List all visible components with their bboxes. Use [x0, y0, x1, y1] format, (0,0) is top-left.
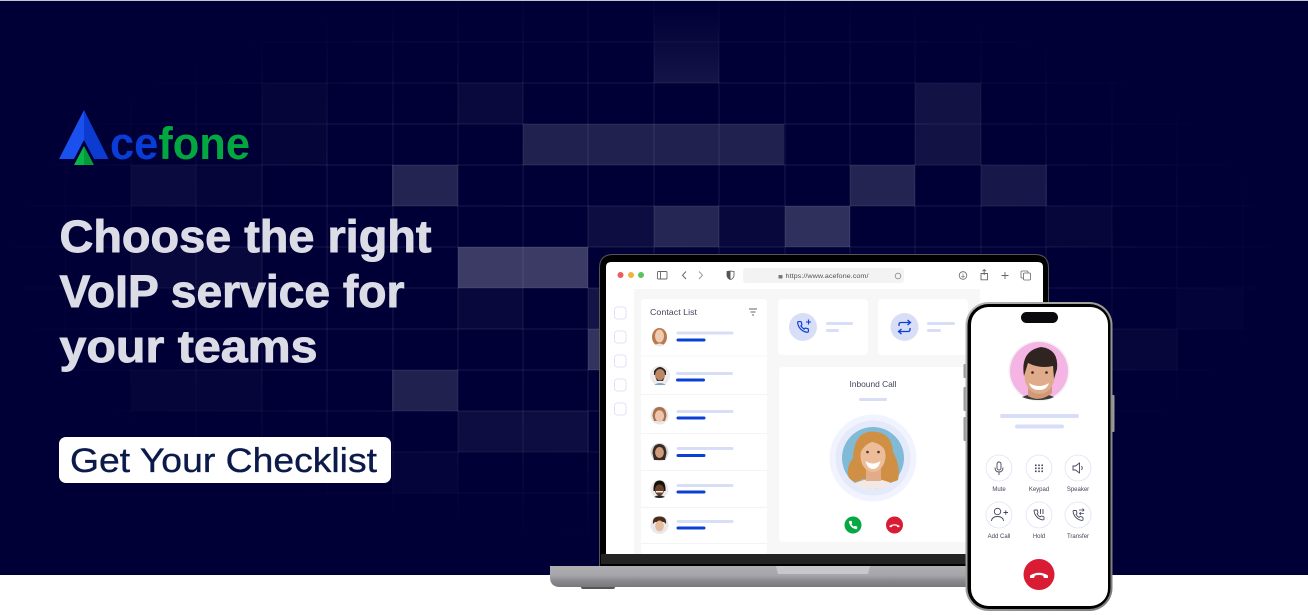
call to action button: Get Your Checklist	[70, 442, 378, 480]
phone side buttons	[964, 364, 1114, 441]
heading: Choose the right	[60, 211, 432, 262]
call control: keypad	[1026, 455, 1052, 493]
contact row 3	[650, 406, 734, 424]
add-call card	[778, 299, 868, 355]
contact list panel: Contact List	[650, 308, 698, 317]
call control: hold	[1026, 502, 1052, 540]
heading	[60, 211, 432, 372]
call control: hold: Hold	[1033, 534, 1045, 540]
logo: Acefone	[59, 110, 250, 169]
phone	[964, 302, 1114, 611]
call control: transfer: Transfer	[1067, 534, 1089, 540]
browser toolbar	[618, 268, 1030, 283]
call control: add call: Add Call	[988, 534, 1010, 540]
laptop screen frame	[599, 254, 1049, 566]
browser toolbar: https://www.acefone.com/	[786, 273, 869, 280]
call control: mute	[986, 455, 1012, 493]
call control: keypad: Keypad	[1029, 487, 1049, 493]
end call button	[1024, 559, 1054, 590]
inbound call panel: Inbound Call	[849, 379, 897, 389]
call control: speaker: Speaker	[1067, 487, 1089, 493]
answer button	[844, 516, 862, 534]
laptop base	[550, 566, 1010, 589]
callee portrait	[1008, 340, 1070, 402]
laptop	[550, 254, 1049, 589]
call control: mute: Mute	[992, 487, 1006, 493]
contact row 5	[650, 480, 734, 498]
contact row 6	[650, 516, 734, 534]
call to action button	[59, 437, 391, 483]
decline button	[886, 516, 903, 534]
caller portrait	[830, 414, 916, 502]
sidebar checkboxes	[614, 307, 626, 415]
app background	[634, 289, 980, 554]
heading: your teams	[60, 321, 318, 372]
heading: VoIP service for	[60, 266, 404, 317]
contact row 2	[650, 366, 733, 386]
callee name placeholders	[1000, 414, 1079, 428]
logo: Acefone: cefone	[110, 118, 250, 169]
phone body	[966, 302, 1112, 611]
call control: add call	[986, 502, 1012, 540]
contact row 1	[652, 328, 734, 346]
call control: transfer	[1065, 502, 1091, 540]
transfer card	[878, 299, 968, 355]
contact row 4	[650, 443, 734, 461]
contact list panel	[641, 299, 767, 554]
inbound call panel	[779, 367, 974, 542]
call control: speaker	[1065, 455, 1091, 493]
